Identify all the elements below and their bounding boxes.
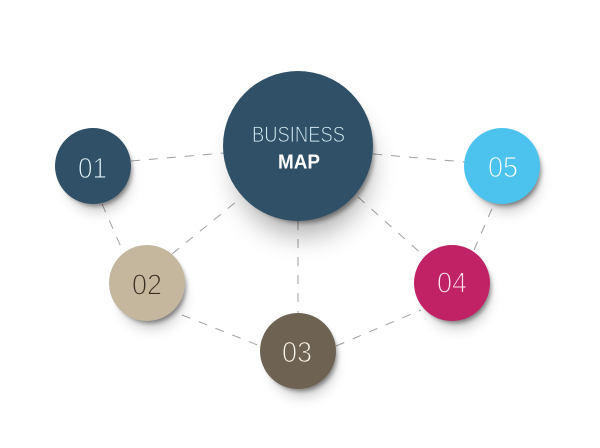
- node 02: [109, 245, 185, 321]
- shadows: [60, 81, 541, 396]
- node 05: 05: [488, 152, 518, 184]
- label: business: BUSINESS: [252, 122, 345, 147]
- label: map: MAP: [278, 152, 320, 174]
- node 03: 03: [282, 337, 312, 369]
- node 01: 01: [78, 153, 107, 185]
- node 01: [55, 128, 131, 204]
- node 04: 04: [437, 268, 467, 300]
- dashed connectors: [102, 153, 494, 346]
- node 03: [260, 313, 336, 389]
- node 02: 02: [132, 270, 162, 302]
- node 05: [464, 128, 540, 204]
- node 04: [414, 245, 490, 321]
- central circle: business map: [223, 71, 373, 221]
